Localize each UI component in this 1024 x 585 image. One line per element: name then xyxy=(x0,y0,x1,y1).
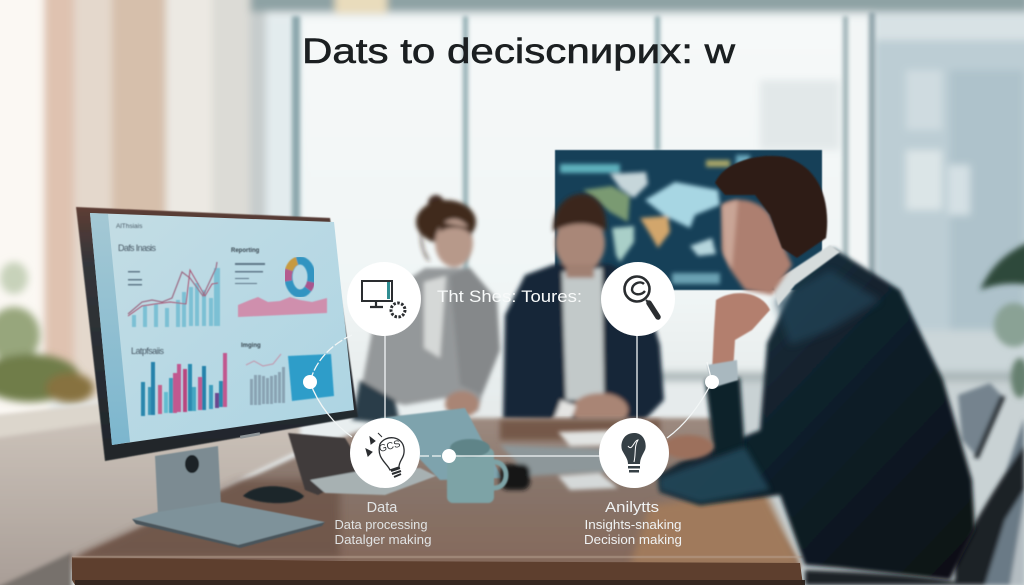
icon node: light bulb with data: GCS xyxy=(378,439,402,455)
bar chart xyxy=(141,353,227,416)
caption: data xyxy=(334,500,432,547)
grey bars with trend line xyxy=(246,354,285,405)
dashboard headings: Imging xyxy=(241,343,261,349)
plants on the window sill xyxy=(0,262,94,403)
icon node: monitor and gear xyxy=(347,262,421,336)
chairs on the right xyxy=(805,383,1024,585)
caption: analytics xyxy=(584,499,682,547)
dashboard headings: Dafs Inasis xyxy=(118,243,156,253)
dashboard headings: Reporting xyxy=(231,248,260,254)
caption: data: Data xyxy=(367,500,398,516)
line and bar chart xyxy=(128,262,220,327)
node dot: right xyxy=(705,375,719,389)
node dot: bottom xyxy=(442,449,456,463)
desk items: papers and phone xyxy=(500,430,640,490)
plant on the right xyxy=(980,242,1024,398)
wall display: world map xyxy=(555,150,822,290)
mouse xyxy=(243,486,304,503)
window mullions xyxy=(292,12,875,387)
monitor stand xyxy=(132,446,325,548)
dashboard headings xyxy=(116,223,261,356)
blue summary card xyxy=(288,354,334,401)
person: woman in grey jacket xyxy=(352,195,500,425)
connecting lines of the cycle xyxy=(310,335,712,456)
donut chart xyxy=(288,260,312,294)
person: man seen from behind xyxy=(658,156,975,580)
caption: data: Data processing xyxy=(334,518,428,532)
icon node: dark light bulb xyxy=(599,418,669,488)
caption: analytics: Decision making xyxy=(584,533,682,547)
mug xyxy=(447,439,506,503)
dashboard headings: AlThsiais xyxy=(116,223,143,230)
person: man in dark suit xyxy=(503,194,664,430)
center label: Tht Shes: Toures: xyxy=(437,287,582,306)
caption: data: Datalger making xyxy=(334,533,432,547)
pink area chart xyxy=(238,297,327,317)
caption: analytics: Insights-snaking xyxy=(584,518,682,532)
title: Dats to deciscnирих: w xyxy=(302,32,736,71)
dashboard headings: Latpfsaiis xyxy=(131,346,164,356)
side wall and sill xyxy=(0,400,300,585)
icon node: light bulb with data xyxy=(350,418,420,488)
small stat lines xyxy=(128,263,265,286)
caption: analytics: Anilytts xyxy=(605,499,659,516)
node dot: left xyxy=(303,375,317,389)
laptop xyxy=(288,408,502,495)
icon node: magnifying glass xyxy=(601,262,675,336)
conference table xyxy=(72,418,805,585)
monitor with analytics dashboard xyxy=(76,207,358,461)
